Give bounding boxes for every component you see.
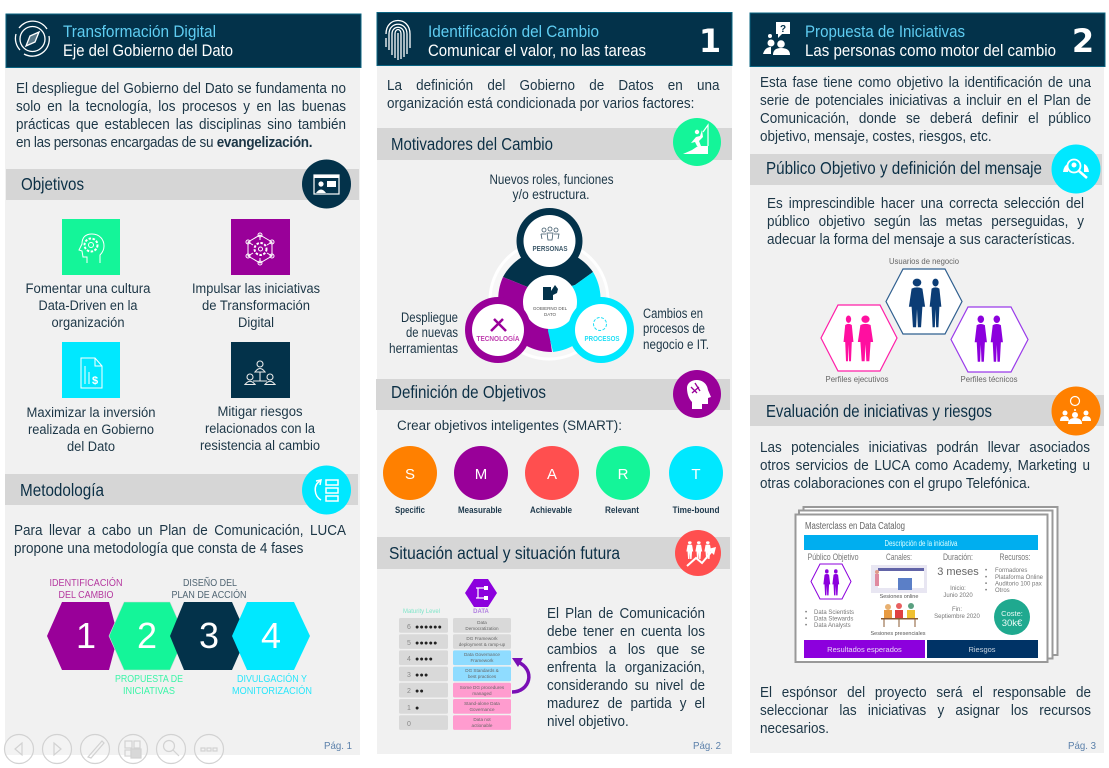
objective: cultura Data-Driven: Fomentar una cultura: [26, 281, 151, 296]
level 6: Democratization: [465, 626, 499, 631]
section: Definición de Objetivos: [376, 370, 730, 418]
text: SMART intro: Crear objetivos inteligentes (SMART):: [397, 418, 622, 433]
objective: Mitigar riesgos: resistencia al cambio: [200, 438, 320, 453]
card footer: resultados: Resultados esperados: [827, 645, 902, 654]
column: canales: Sesiones online: [880, 594, 918, 600]
text: evaluación: otras colaboraciones con el grupo Telefónica.: [760, 476, 1030, 492]
text: evaluación: Las potenciales iniciativas podrán llevar asociados: [760, 440, 1090, 456]
text: público objetivo: adecuar la forma del mensaje a sus características.: [767, 232, 1075, 248]
level 0: Data not: [473, 717, 491, 722]
column: recursos: •: [985, 575, 987, 581]
column: recursos: Recursos:: [1000, 552, 1030, 562]
icon: compass: [15, 21, 49, 56]
label: procesos: negocio e IT.: [643, 337, 709, 352]
chart: 4 phase hexagons: [47, 576, 312, 697]
hexagon 3: 3: [199, 615, 219, 656]
label: procesos: [643, 306, 709, 352]
text: Plan de Comunicación: El Plan de Comunicación: [547, 606, 705, 622]
column: público objetivo: •: [805, 610, 807, 616]
text: público objetivo: Es imprescindible hacer una correcta selección del: [767, 196, 1084, 212]
icon: head with gear: [79, 234, 104, 263]
column: recursos: Auditorio 100 pax: [995, 582, 1042, 588]
label: tecnología: herramientas: [389, 341, 458, 356]
level 3: DG Standards &: [465, 668, 499, 673]
level 5: [399, 634, 511, 649]
level 2: Some DG procedures: [460, 685, 505, 690]
level 2: 2: [407, 688, 411, 695]
text: Plan de Comunicación: madurez de partida y el: [547, 696, 705, 712]
level 4: ●●●●: [415, 656, 433, 663]
icon: data hexagon: [465, 579, 497, 607]
column: duración: Septiembre 2020: [934, 614, 981, 620]
profile: usuarios de negocio: [886, 256, 962, 334]
column: público objetivo: •: [805, 616, 807, 622]
icon: people growth: [675, 530, 721, 576]
label: tecnología: Despliegue: [401, 310, 458, 325]
chart: perfiles de público objetivo: [821, 256, 1028, 384]
icon: team idea: [1052, 386, 1100, 436]
S: Specific: [383, 446, 437, 515]
objective: Transformación Digital: de Transformación: [202, 298, 310, 313]
text: intro Transformación Digital: solo en la tecnología, los procesos y en las buenas: [16, 99, 346, 115]
text: intro Transformación Digital: [16, 81, 346, 151]
level 2: [399, 683, 511, 698]
label: tecnología: de nuevas: [406, 325, 458, 340]
label: phase 1: IDENTIFICACIÓN: [50, 576, 122, 589]
objective: Maximizar la inversión: realizada en Gobierno: [28, 422, 154, 437]
M: Measurable: M: [475, 466, 487, 483]
objective: Maximizar la inversión: Maximizar la inversión: [26, 405, 156, 420]
header title: Identificación del Cambio: [428, 22, 599, 41]
column headings: Maturity Level: [403, 609, 440, 615]
section: Público Objetivo: [750, 144, 1102, 194]
label: phase 3: PLAN DE ACCIÓN: [172, 588, 246, 601]
node: procesos: PROCESOS: [584, 336, 620, 343]
section: Metodología: [5, 466, 358, 514]
panel: Identificación del Cambio: [376, 12, 732, 754]
level 1: [399, 699, 511, 714]
card footer: riesgos: Riesgos: [968, 645, 996, 654]
hexagon 4: [232, 602, 310, 670]
column: recursos: 30k€: [1002, 618, 1023, 629]
objective: Maximizar la inversión: [26, 342, 156, 454]
column: duración: 3 meses: [937, 566, 979, 578]
section: Evaluación de iniciativas y riesgos: [750, 386, 1104, 436]
icon: financial document: $: [92, 375, 98, 387]
column headings: DATA: [473, 609, 490, 615]
text: espónsor: necesarios.: [760, 721, 829, 737]
objective: Mitigar riesgos: relacionados con la: [205, 421, 315, 436]
level 3: best practices: [468, 674, 497, 679]
profile: perfiles técnicos: Perfiles técnicos: [960, 374, 1018, 384]
label: tecnología: [389, 310, 458, 356]
objective: cultura Data-Driven: Data-Driven en la: [38, 298, 138, 313]
level 3: [399, 667, 511, 681]
card title: Masterclass en Data Catalog: [805, 521, 905, 532]
text: intro Propuesta: Comunicación, donde se deberá definir el público: [760, 111, 1091, 127]
label: phase 4: MONITORIZACIÓN: [232, 684, 312, 697]
chart: maturity level: [399, 579, 529, 730]
label: phase 3: [172, 576, 246, 601]
arrow: maturity progress: [512, 658, 529, 692]
level 6: Data: [477, 620, 487, 625]
column: canales: Sesiones presenciales: [870, 631, 926, 637]
objective: cultura Data-Driven: organización: [52, 315, 124, 330]
objective: Mitigar riesgos: [200, 342, 320, 453]
level 1: 1: [407, 705, 411, 712]
objective: Transformación Digital: Impulsar las iniciativas: [192, 281, 320, 296]
label: phase 1: [50, 576, 122, 601]
column: duración: Inicio:: [950, 586, 966, 592]
card banner: Descripción de la iniciativa: [884, 539, 958, 548]
icon: presentation window: [302, 160, 351, 208]
icon: people with question: ?: [780, 24, 786, 35]
level 5: ●●●●●: [415, 640, 438, 647]
text: evaluación: [760, 440, 1090, 492]
column headings: [403, 609, 490, 615]
text: intro Transformación Digital: prácticas que establecen las disciplinas sino también: [16, 117, 346, 133]
icon: people with question: [763, 22, 790, 55]
chart: motivadores del cambio: [389, 172, 709, 363]
level 1: ●: [415, 705, 419, 712]
label: phase 3: DISEÑO DEL: [183, 576, 237, 589]
objective: Transformación Digital: [192, 219, 320, 330]
A: Achievable: A: [547, 466, 557, 483]
hexagon 2: [109, 602, 185, 670]
icon: gear network: [246, 233, 274, 265]
level 5: DG Framework: [466, 636, 498, 641]
column: recursos: Formadores: [995, 568, 1027, 574]
text: público objetivo: [767, 196, 1084, 248]
middle card: [799, 510, 1052, 658]
level 3: ●●●: [415, 672, 429, 679]
icon: process list: [302, 466, 351, 514]
label: procesos: procesos de: [643, 321, 705, 336]
text: intro Identificación: organización está condicionada por varios factores:: [386, 96, 694, 112]
hexagon 2: 2: [137, 615, 157, 656]
A: Achievable: Achievable: [530, 505, 572, 515]
card banner: [804, 535, 1038, 550]
objective: Mitigar riesgos: Mitigar riesgos: [218, 404, 303, 419]
section: Motivadores del Cambio: [377, 118, 732, 166]
objective: Maximizar la inversión: del Dato: [67, 439, 115, 454]
column: recursos: •: [985, 568, 987, 574]
card footer: riesgos: [927, 640, 1038, 658]
column: duración: [934, 552, 981, 620]
hexagon 3: [170, 602, 247, 670]
sector: personas: [503, 249, 593, 292]
icon: fingerprint: [386, 20, 410, 60]
header subtitle: Las personas como motor del cambio: [805, 41, 1056, 60]
T: Time-bound: Time-bound: [672, 505, 720, 515]
chart: initiative cards: [796, 507, 1058, 662]
level 6: 6: [407, 624, 411, 631]
text: intro Propuesta: [760, 75, 1091, 145]
S: Specific: Specific: [395, 505, 425, 515]
label: phase 2: [115, 673, 183, 697]
level 5: deployment & ramp-up: [459, 642, 506, 647]
node: gobierno del dato: GOBIERNO DEL: [533, 306, 568, 311]
level 6: ●●●●●●: [415, 624, 442, 631]
section: Evaluación de iniciativas y riesgos: Evaluación de iniciativas y riesgos: [766, 401, 992, 421]
level 3: 3: [407, 672, 411, 679]
section: Público Objetivo: Público Objetivo y definición del mensaje: [766, 158, 1042, 178]
level 0: 0: [407, 721, 411, 728]
hexagon 4: 4: [261, 615, 281, 656]
column: público objetivo: Data Scientists: [814, 610, 854, 616]
back card: [804, 507, 1058, 655]
column: público objetivo: Data Analysts: [814, 623, 851, 629]
card footer: resultados: [804, 640, 925, 658]
page number 2: Pág. 2: [693, 740, 721, 752]
column: recursos: Coste:: [1001, 609, 1023, 618]
column: público objetivo: Público Objetivo: [808, 552, 858, 562]
column: público objetivo: •: [805, 623, 807, 629]
text: intro Propuesta: Esta fase tiene como objetivo la identificación de una: [760, 75, 1091, 91]
section: Objetivos: Objetivos: [21, 174, 84, 194]
text: intro Propuesta: objetivo, mensaje, costes, riesgos, etc.: [760, 129, 992, 145]
section: Objetivos: [6, 160, 359, 208]
text: intro Metodología: [14, 523, 346, 557]
T: Time-bound: T: [691, 466, 701, 483]
R: Relevant: Relevant: [605, 505, 639, 515]
text: Plan de Comunicación: [547, 606, 705, 730]
level 2: ●●: [415, 688, 424, 695]
text: público objetivo: público objetivo según las metas perseguidas, y: [767, 214, 1084, 230]
header title: Propuesta de Iniciativas: [805, 22, 965, 41]
column: duración: Fin:: [952, 607, 962, 613]
text: evaluación: otros servicios de LUCA como Academy, Marketing u: [760, 458, 1090, 474]
node: tecnología: TECNOLOGÍA: [476, 334, 520, 343]
text: intro Transformación Digital: en las personas encargadas de su evangelización.: [16, 135, 312, 151]
chart: SMART circles: [383, 446, 723, 515]
front card: [796, 514, 1048, 662]
R: Relevant: [596, 446, 650, 515]
T: Time-bound: [669, 446, 723, 515]
level 5: 5: [407, 640, 411, 647]
level 0: [399, 715, 511, 730]
profile: usuarios de negocio: Usuarios de negocio: [889, 256, 959, 266]
column: público objetivo: Data Stewards: [814, 616, 853, 622]
M: Measurable: [454, 446, 508, 515]
text: Plan de Comunicación: considerando su nivel de: [547, 678, 705, 694]
text: espónsor: [760, 685, 1091, 737]
node: gobierno del dato: DATO: [544, 312, 557, 317]
level 4: [399, 650, 511, 665]
column: público objetivo: [805, 552, 858, 629]
level 1: Stand-alone Data: [464, 701, 500, 706]
text: Plan de Comunicación: cambios a los que se: [547, 642, 705, 658]
section: Definición de Objetivos: Definición de Objetivos: [391, 382, 546, 402]
section: Metodología: Metodología: [20, 480, 104, 500]
icon: climber: [673, 118, 721, 166]
label: personas: y/o estructura.: [512, 187, 590, 202]
column: recursos: •: [985, 588, 987, 594]
text: intro Metodología: propone una metodología que consta de 4 fases: [14, 541, 303, 557]
S: Specific: S: [405, 466, 415, 483]
icon: audience search: [1052, 144, 1100, 194]
profile: perfiles ejecutivos: [821, 305, 897, 384]
level 4: 4: [407, 656, 411, 663]
slideshow controls: [4, 734, 224, 764]
node: procesos: [568, 297, 634, 363]
panel: Transformación Digital: [5, 14, 361, 755]
text: intro Metodología: Para llevar a cabo un Plan de Comunicación, LUCA: [14, 523, 346, 539]
label: procesos: Cambios en: [643, 306, 703, 321]
header subtitle: Eje del Gobierno del Dato: [63, 41, 233, 60]
level 4: Framework: [471, 658, 494, 663]
section: Motivadores del Cambio: Motivadores del Cambio: [391, 134, 553, 154]
text: Plan de Comunicación: debe tener en cuenta los: [547, 624, 705, 640]
node: gobierno del dato: [523, 275, 577, 329]
diagram ring: [490, 241, 608, 359]
column: duración: Junio 2020: [943, 593, 973, 599]
sector: tecnología: [498, 277, 552, 352]
page number 3: Pág. 3: [1068, 740, 1096, 752]
R: Relevant: R: [618, 466, 629, 483]
level 2: managed: [472, 691, 492, 696]
M: Measurable: Measurable: [458, 505, 502, 515]
header subtitle: Comunicar el valor, no las tareas: [428, 41, 646, 60]
column: canales: [870, 552, 927, 637]
text: Plan de Comunicación: enfrenta la organización,: [547, 660, 705, 676]
node: tecnología: [465, 297, 531, 363]
column: canales: Canales:: [886, 552, 912, 562]
objective: cultura Data-Driven: [26, 219, 151, 330]
hexagon 1: [47, 602, 118, 670]
level 0: actionable: [472, 723, 493, 728]
column: recursos: [985, 552, 1044, 635]
level 1: Governance: [469, 707, 495, 712]
header: Propuesta de Iniciativas: [750, 13, 1105, 66]
text: Plan de Comunicación: nivel objetivo.: [547, 714, 629, 730]
sector: procesos: [548, 272, 601, 352]
column: recursos: Otros: [995, 588, 1010, 594]
label: personas: Nuevos roles, funciones: [490, 172, 614, 187]
label: phase 1: DEL CAMBIO: [58, 589, 114, 601]
header: Transformación Digital: [6, 14, 361, 68]
text: intro Propuesta: serie de potenciales iniciativas a incluir en el Plan de: [760, 93, 1091, 109]
header title: Transformación Digital: [63, 22, 216, 41]
text: espónsor: El espónsor del proyecto será el responsable de: [760, 685, 1091, 701]
icon: brain head: [673, 370, 721, 418]
panel: Propuesta de Iniciativas: [750, 13, 1105, 753]
label: phase 4: DIVULGACIÓN Y: [237, 672, 307, 685]
text: intro Identificación: La definición del Gobierno de Datos en una: [386, 78, 719, 94]
profile: perfiles técnicos: [951, 307, 1028, 384]
column: recursos: Plataforma Online: [995, 575, 1044, 581]
phase number 2: 2: [1072, 22, 1094, 60]
section: Situación actual y situación futura: Situación actual y situación futura: [389, 543, 620, 563]
column: recursos: •: [985, 582, 987, 588]
label: phase 4: [232, 672, 312, 697]
hexagon 1: 1: [76, 615, 96, 656]
A: Achievable: [525, 446, 579, 515]
header: Identificación del Cambio: [377, 12, 732, 66]
text: espónsor: seleccionar las iniciativas y asignar los recursos: [760, 703, 1091, 719]
label: personas: [490, 172, 614, 202]
section: Situación actual y situación futura: [377, 530, 730, 576]
label: phase 2: PROPUESTA DE: [115, 673, 183, 685]
page number 1: Pág. 1: [324, 740, 352, 752]
level 4: Data Governance: [464, 652, 500, 657]
label: phase 2: INICIATIVAS: [123, 685, 175, 697]
text: intro Identificación: [386, 78, 720, 112]
text: intro Transformación Digital: El despliegue del Gobierno del Dato se fundamenta no: [16, 81, 346, 97]
objective: Transformación Digital: Digital: [238, 315, 274, 330]
node: personas: [516, 208, 582, 274]
phase number 1: 1: [699, 22, 721, 60]
profile: perfiles ejecutivos: Perfiles ejecutivos: [826, 374, 888, 384]
level 6: [399, 618, 511, 633]
node: personas: PERSONAS: [532, 246, 568, 253]
column: duración: Duración:: [943, 552, 973, 562]
icon: team hierarchy: [245, 361, 275, 384]
